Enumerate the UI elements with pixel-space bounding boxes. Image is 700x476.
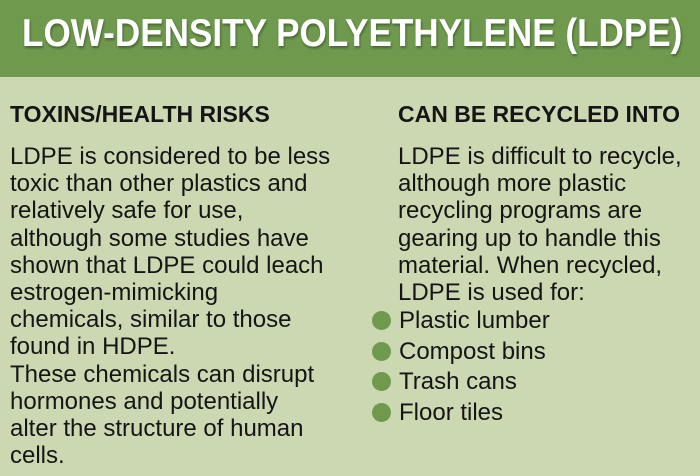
- text block: recycled: [398, 143, 682, 306]
- text block: toxins: relatively safe for use,: [10, 197, 243, 224]
- text block: toxins: estrogen-mimicking: [10, 279, 218, 306]
- text block: recycled: recycling programs are: [398, 197, 642, 224]
- text block: recycled: LDPE is difficult to recycle,: [398, 143, 682, 170]
- text block: toxins: hormones and potentially: [10, 388, 278, 415]
- text block: toxins: although some studies have: [10, 225, 309, 252]
- text block: recycled: although more plastic: [398, 170, 626, 197]
- title: LOW-DENSITY POLYETHYLENE (LDPE): [22, 12, 682, 55]
- bullet: floor tiles: Floor tiles: [399, 399, 503, 426]
- text block: toxins: cells.: [10, 442, 65, 469]
- text block: toxins: alter the structure of human: [10, 415, 303, 442]
- bullet list: [372, 307, 550, 426]
- text block: toxins: LDPE is considered to be less: [10, 143, 330, 170]
- text block: toxins: toxic than other plastics and: [10, 170, 308, 197]
- bullet: compost bins: Compost bins: [399, 338, 546, 365]
- header band: [0, 0, 700, 77]
- bullet: trash cans: Trash cans: [399, 368, 517, 395]
- heading: toxins: TOXINS/HEALTH RISKS: [10, 101, 270, 127]
- text block: toxins: These chemicals can disrupt: [10, 361, 314, 388]
- bullet: plastic lumber: Plastic lumber: [399, 307, 550, 334]
- text block: recycled: LDPE is used for:: [398, 279, 585, 306]
- text block: toxins: chemicals, similar to those: [10, 306, 291, 333]
- heading: recycled into: CAN BE RECYCLED INTO: [398, 101, 680, 127]
- text block: toxins: shown that LDPE could leach: [10, 252, 324, 279]
- text block: recycled: material. When recycled,: [398, 252, 662, 279]
- text block: toxins: [10, 143, 330, 469]
- text block: recycled: gearing up to handle this: [398, 225, 661, 252]
- text block: toxins: found in HDPE.: [10, 333, 175, 360]
